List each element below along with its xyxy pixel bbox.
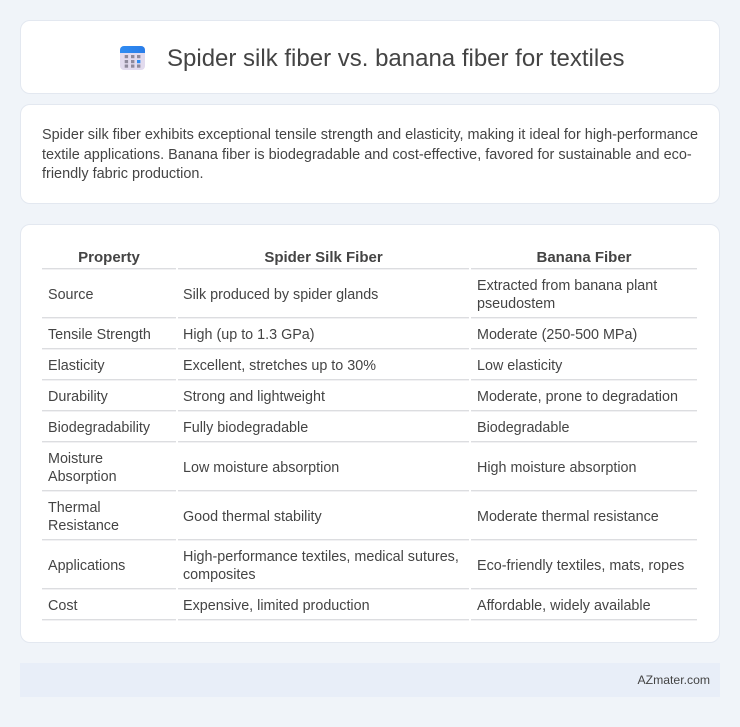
row: Moisture Absorption: Moisture: [48, 451, 103, 467]
row: Applications: Applications: [48, 558, 125, 574]
intro card: [20, 104, 720, 204]
header: Property: Property: [78, 249, 140, 266]
row: Thermal Resistance: Resistance: [48, 518, 119, 534]
icon: calendar: [120, 46, 145, 70]
row: Tensile Strength: Tensile Strength: [48, 327, 151, 343]
row: Biodegradability: Biodegradability: [48, 420, 150, 436]
comparison table: High (up to 1.3 GPa): [183, 327, 315, 343]
comparison table: Moderate (250-500 MPa): [477, 327, 637, 343]
comparison table: Low elasticity: [477, 358, 562, 374]
row: Moisture Absorption: Absorption: [48, 469, 117, 485]
comparison table: Eco-friendly textiles, mats, ropes: [477, 558, 684, 574]
comparison table: pseudostem: [477, 296, 555, 312]
footer credit: AZmater.com: [638, 673, 710, 687]
intro text: [42, 127, 698, 182]
comparison table: Biodegradable: [477, 420, 570, 436]
comparison table: Fully biodegradable: [183, 420, 308, 436]
header: Banana Fiber: Banana Fiber: [536, 249, 632, 266]
comparison table: High moisture absorption: [477, 460, 636, 476]
row: Thermal Resistance: [48, 500, 119, 534]
intro text: friendly fabric production.: [42, 166, 203, 182]
comparison table: Moderate thermal resistance: [477, 509, 659, 525]
comparison table: High-performance textiles, medical sutures,: [183, 549, 459, 565]
footer bar: [20, 663, 720, 697]
intro text: Spider silk fiber exhibits exceptional tensile strength and elasticity, making it ideal for high-performance: [42, 127, 698, 143]
comparison table: composites: [183, 567, 256, 583]
row: Cost: Cost: [48, 598, 78, 614]
comparison table: Excellent, stretches up to 30%: [183, 358, 376, 374]
row: Thermal Resistance: Thermal: [48, 500, 101, 516]
comparison table: Extracted from banana plant: [477, 278, 657, 294]
table card: [20, 224, 720, 643]
comparison table: Good thermal stability: [183, 509, 322, 525]
row: Durability: Durability: [48, 389, 108, 405]
intro text: textile applications. Banana fiber is biodegradable and cost-effective, favored for sustainable and eco-: [42, 146, 692, 162]
comparison table: Low moisture absorption: [183, 460, 339, 476]
comparison table: Strong and lightweight: [183, 389, 325, 405]
comparison table: Expensive, limited production: [183, 598, 370, 614]
comparison table: Affordable, widely available: [477, 598, 651, 614]
row: Elasticity: Elasticity: [48, 358, 105, 374]
row: Moisture Absorption: [48, 451, 117, 485]
header: Spider Silk Fiber: Spider Silk Fiber: [264, 249, 383, 266]
title card: [20, 20, 720, 94]
title: Spider silk fiber vs. banana fiber for textiles: [167, 45, 625, 72]
comparison table: Moderate, prone to degradation: [477, 389, 678, 405]
row: Source: Source: [48, 287, 93, 303]
comparison table: Silk produced by spider glands: [183, 287, 378, 303]
